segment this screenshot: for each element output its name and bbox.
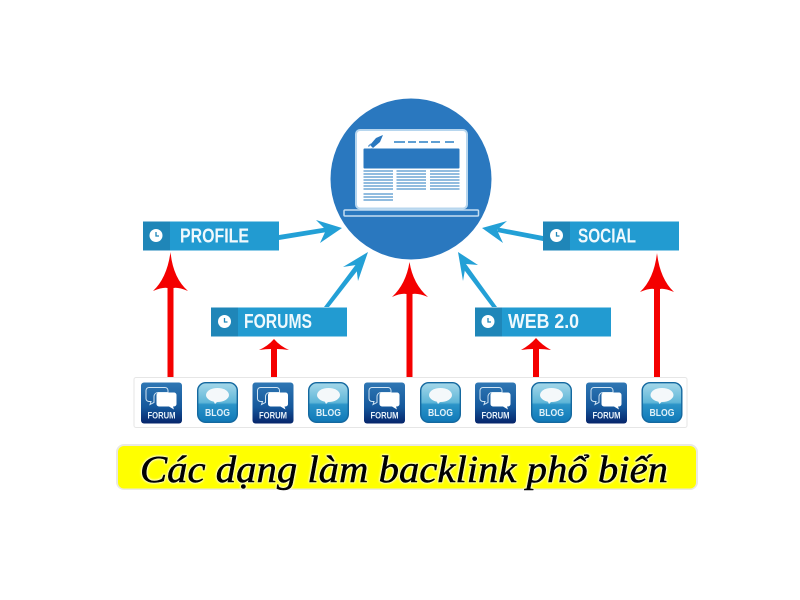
blue arrow: forums to centre [324,252,368,307]
icon: forum 3 [364,382,405,424]
icon: blog 4 [532,383,571,422]
red arrow: to profile [153,252,188,377]
blue arrow: web 2.0 to centre [458,252,497,307]
red arrow: to web 2.0 [521,338,551,377]
icon strip [134,378,687,428]
icon: forum 4 [475,382,516,424]
icon: blog 2 [309,383,348,422]
label: social [543,222,679,250]
red arrow: to centre [392,262,428,377]
icon: blog 3 [421,383,460,422]
icon: forum 5 [586,382,627,424]
central circle with laptop [330,98,492,260]
icon: rocket [368,135,383,150]
red arrow: to forums [259,339,289,377]
icon: laptop [344,130,478,216]
blue arrow: profile to centre [279,220,342,243]
label: social: SOCIAL [578,226,636,248]
label: profile: PROFILE [180,226,249,248]
icon: blog 1 [198,383,237,422]
label: web 2.0 [475,308,611,336]
caption banner: Các dạng làm backlink phổ biến [140,449,668,491]
label: web 2.0: WEB 2.0 [508,311,579,333]
blue arrow: social to centre [482,221,543,243]
red arrow: to social [640,253,674,377]
icon: forum 2 [252,382,294,424]
icon: forum 1 [141,382,182,424]
icon: blog 5 [642,383,682,422]
label: profile [143,222,279,250]
label: forums: FORUMS [244,311,312,333]
label: forums [211,308,347,336]
